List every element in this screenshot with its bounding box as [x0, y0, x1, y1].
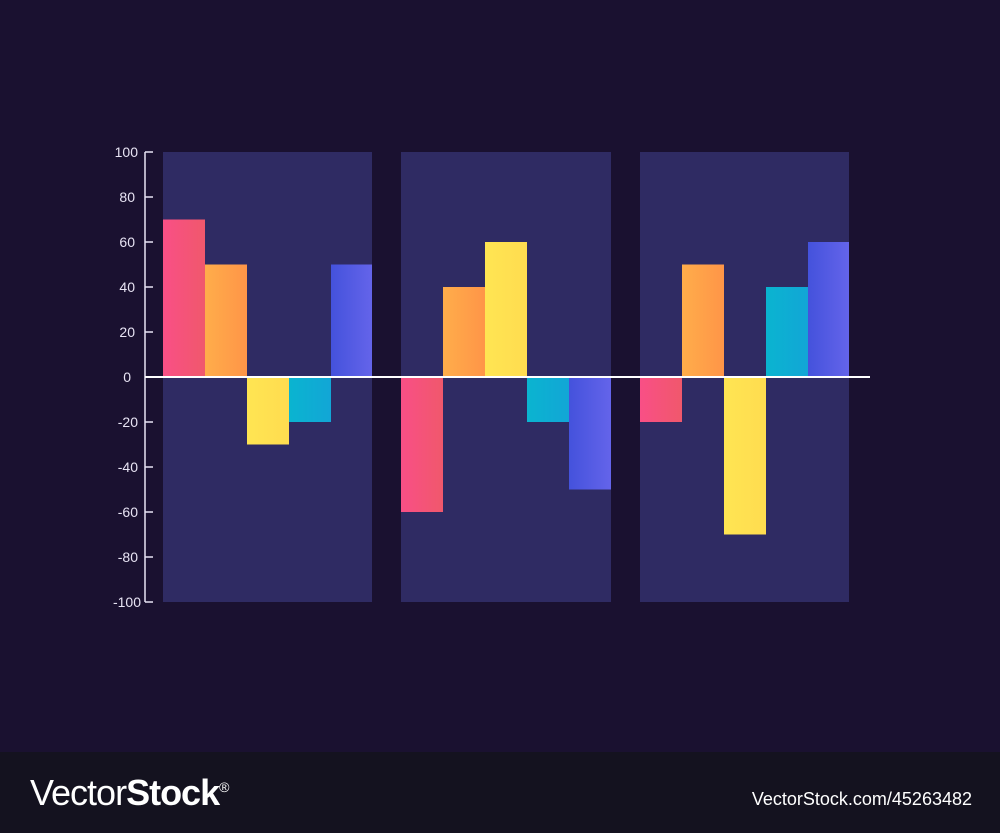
y axis: -40: [118, 459, 138, 475]
footer: [0, 752, 1000, 833]
panel: group 2: [401, 152, 611, 602]
y axis: 40: [119, 279, 135, 295]
zero line: [145, 376, 870, 378]
y axis: [113, 144, 153, 610]
y axis: 100: [115, 144, 138, 160]
y axis: -20: [118, 414, 138, 430]
panel: group 3: [640, 152, 849, 602]
y axis: -80: [118, 549, 138, 565]
y axis: 20: [119, 324, 135, 340]
panel: group 1: [163, 152, 372, 602]
footer logo: VectorStock®: [30, 772, 228, 813]
y axis: 60: [119, 234, 135, 250]
y axis: -100: [113, 594, 141, 610]
y axis: 0: [123, 369, 131, 385]
y axis: -60: [118, 504, 138, 520]
footer id: VectorStock.com/45263482: [752, 789, 972, 809]
y axis: 80: [119, 189, 135, 205]
